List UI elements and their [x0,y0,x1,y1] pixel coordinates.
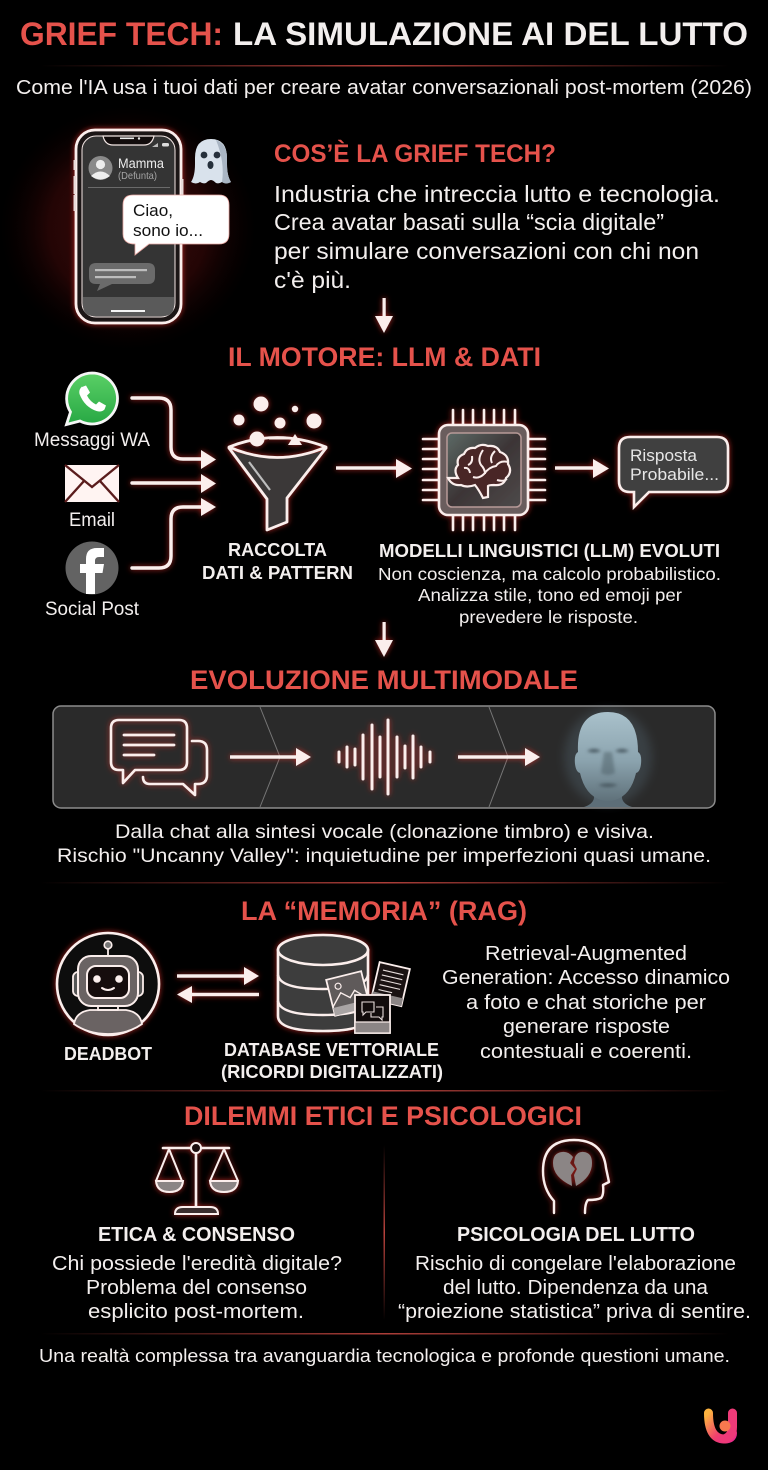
text block: rag explanation: generare risposte [503,1016,670,1038]
panel: etica e consenso: Problema del consenso [86,1277,307,1299]
label: raccolta dati: DATI & PATTERN [202,563,353,583]
text block: rag explanation: a foto e chat storiche per [466,992,706,1014]
text block: multimodal caption: Dalla chat alla sintesi vocale (clonazione timbro) e visiva. [115,821,654,843]
contact name: Mamma [118,156,164,171]
text block: rag explanation: Generation: Accesso dinamico [442,967,730,989]
arrows: sources to funnel [132,398,216,568]
panel: psicologia del lutto: del lutto. Dipendenza da una [443,1277,709,1299]
heading: evoluzione: EVOLUZIONE MULTIMODALE [190,665,578,695]
icon: ai chip with brain [423,410,545,530]
footer text: Una realtà complessa tra avanguardia tecnologica e profonde questioni umane. [39,1346,730,1366]
callout: risposta probabile: Risposta [630,446,698,465]
panel: psicologia del lutto: PSICOLOGIA DEL LUTTO [457,1224,695,1246]
panel: psicologia del lutto: Rischio di congelare l'elaborazione [415,1253,736,1275]
icon: ghost [191,139,231,184]
label: deadbot: DEADBOT [64,1044,152,1064]
subtitle: Come l'IA usa i tuoi dati per creare avatar conversazionali post-mortem (2026) [16,76,752,99]
icon: facebook [66,542,118,594]
callout: risposta probabile [619,437,728,507]
heading: COS’È LA GRIEF TECH? [274,139,556,168]
panel: etica e consenso [52,1224,342,1323]
panel: etica e consenso: Chi possiede l'eredità digitale? [52,1253,342,1275]
label: database vettoriale: (RICORDI DIGITALIZZATI) [221,1062,443,1082]
grey message bubble [89,263,155,291]
icon: sound wave [339,720,430,794]
white speech bubble: sono io... [133,222,203,240]
label: email: Email [69,510,115,531]
text block: modelli linguistici: Non coscienza, ma calcolo probabilistico. [378,564,721,584]
panel: psicologia del lutto [398,1224,751,1323]
icon: chat bubbles [111,720,207,795]
white speech bubble [123,195,229,255]
arrow: voice to face [458,748,540,766]
icon: logo [708,1413,732,1439]
label: raccolta dati [202,540,353,583]
icon: database with memories [278,935,410,1033]
contact name [118,156,164,182]
heading: motore: IL MOTORE: LLM & DATI [228,342,541,372]
icon: phone with chat [0,106,256,350]
label: database vettoriale: DATABASE VETTORIALE [224,1040,439,1060]
text block: rag explanation [442,943,730,1063]
icon: deadbot [57,933,159,1035]
arrow: down to motor [375,298,393,333]
heading: dilemmi: DILEMMI ETICI E PSICOLOGICI [184,1101,582,1131]
icon: head with broken heart [543,1140,609,1213]
title: LA SIMULAZIONE AI DEL LUTTO [233,16,748,52]
icon: digital face [564,709,652,807]
arrow: chat to voice [230,748,311,766]
avatar [88,156,112,180]
description: c'è più. [274,267,351,293]
polaroid chat [355,995,390,1033]
title [20,16,748,52]
arrows: exchange [177,967,259,1003]
text block: modelli linguistici: MODELLI LINGUISTICI (LLM) EVOLUTI [379,541,720,561]
description: per simulare conversazioni con chi non [274,238,699,264]
contact name: (Defunta) [118,170,157,182]
text block: modelli linguistici: prevedere le risposte. [459,607,638,627]
label: raccolta dati: RACCOLTA [228,540,327,560]
description: Industria che intreccia lutto e tecnologia. [274,181,720,207]
panel: cos'è la grief tech [274,139,720,293]
text block: modelli linguistici [378,541,721,627]
heading: memoria: LA “MEMORIA” (RAG) [241,896,527,926]
label: messaggi: Messaggi WA [34,430,150,451]
arrow: chip to response [555,459,609,478]
panel: psicologia del lutto: “proiezione statistica” priva di sentire. [398,1301,751,1323]
white speech bubble: Ciao, [133,202,173,220]
description: Crea avatar basati sulla “scia digitale” [274,209,664,235]
text block: multimodal caption [57,821,711,867]
text block: multimodal caption: Rischio "Uncanny Valley": inquietudine per imperfezioni quasi umane. [57,845,711,867]
icon: email [65,465,119,502]
icon: whatsapp [66,373,118,424]
document [371,962,410,1006]
label: social: Social Post [45,599,140,620]
description [274,181,720,293]
title: GRIEF TECH: [20,16,223,52]
text block: rag explanation: contestuali e coerenti. [480,1041,692,1063]
text block: modelli linguistici: Analizza stile, tono ed emoji per [418,585,682,605]
icon: scales [156,1143,238,1214]
panel: multimodal evolution [53,706,715,808]
arrow: down to evolution [375,622,393,657]
label: database vettoriale [221,1040,443,1082]
icon: funnel [229,396,326,530]
text block: rag explanation: Retrieval-Augmented [485,943,687,965]
panel: etica e consenso: ETICA & CONSENSO [98,1224,295,1246]
arrow: funnel to chip [336,459,412,478]
panel: etica e consenso: esplicito post-mortem. [88,1301,304,1323]
photo [326,971,370,1016]
callout: risposta probabile: Probabile... [630,465,719,484]
